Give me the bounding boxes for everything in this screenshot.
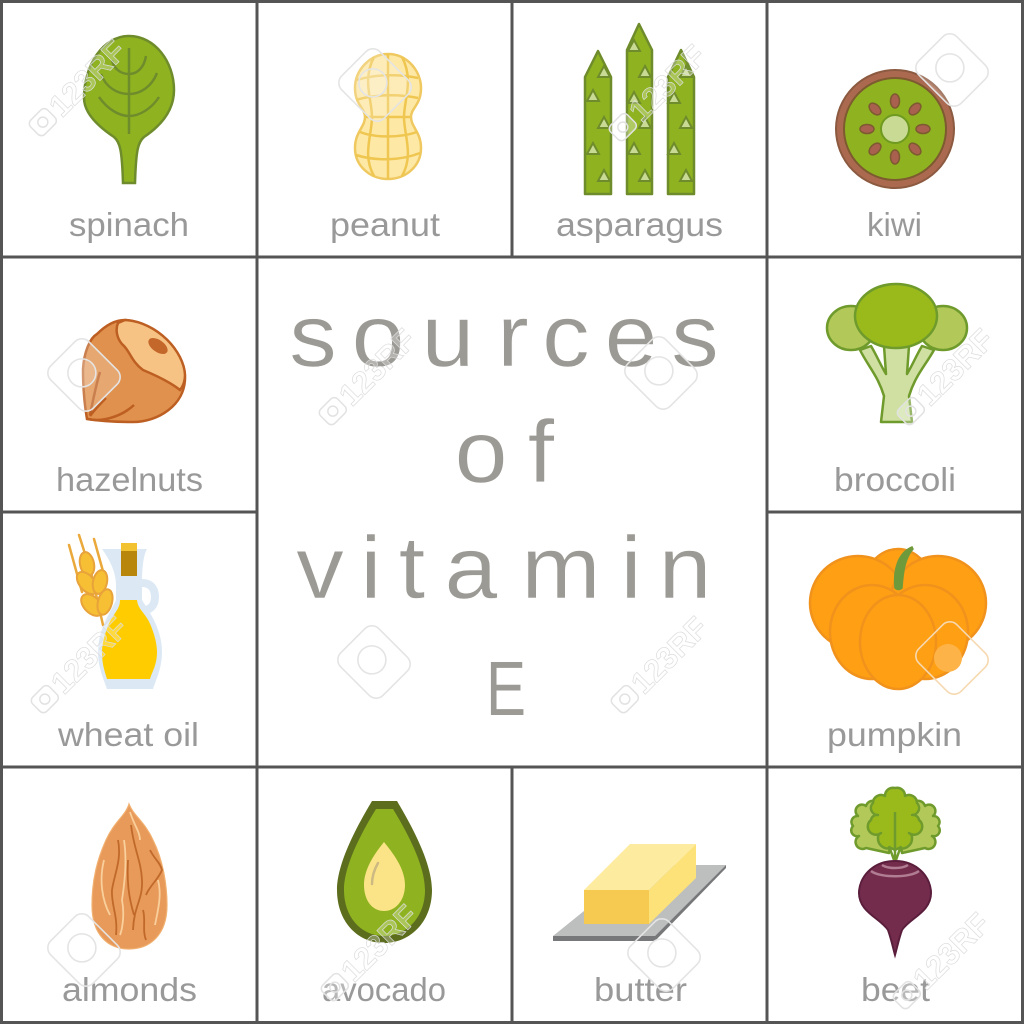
watermarks: 123RF [622,38,713,129]
panel: almonds [62,804,197,1008]
label: pumpkin: pumpkin [827,716,962,753]
label: almonds: almonds [62,971,197,1008]
icon: pumpkin [810,547,986,689]
label: wheat oil: wheat oil [57,716,199,753]
title: sources: sources [289,287,719,385]
label: beet: beet [861,971,930,1008]
watermarks: 123RF [906,906,997,997]
icon: glass jug [98,543,162,689]
panel: pumpkin [810,547,986,753]
panel: beet [851,788,940,1008]
label: avocado: avocado [322,971,446,1008]
icon: peanut [355,54,421,179]
label: kiwi: kiwi [867,206,922,243]
icon: wheat ear [69,535,115,625]
icon: avocado half [337,801,432,943]
panel: hazelnuts [56,320,203,498]
panel: title [289,287,719,732]
icon: spinach leaf [84,36,174,183]
watermarks: 123RF [42,33,133,124]
watermarks: 123RF [44,610,135,701]
label: asparagus: asparagus [556,206,723,243]
icon: kiwi slice [836,70,954,188]
icon: broccoli [827,284,967,422]
title: of: of [455,403,555,501]
panel: spinach [69,36,189,243]
label: butter: butter [594,971,687,1008]
watermarks: 123RF [334,898,425,989]
icon: butter on a dish [553,844,726,941]
icon: beet leaves [851,788,940,860]
panel: kiwi [836,70,954,243]
panel: avocado [322,801,446,1008]
label: broccoli: broccoli [834,461,956,498]
icon: beet [851,788,940,955]
icon: asparagus spears [585,24,694,194]
icon: hazelnut [83,320,185,422]
panel: broccoli [827,284,967,498]
title: E: E [486,646,526,732]
title: vitamin: vitamin [296,519,711,617]
panel: butter [553,844,726,1008]
label: spinach: spinach [69,206,189,243]
panel: peanut [330,54,440,243]
watermarks: 123RF [624,610,715,701]
icon: almond [92,804,167,949]
label: hazelnuts: hazelnuts [56,461,203,498]
watermarks: 123RF [910,322,1001,413]
watermarks: 123RF [332,322,423,413]
panel: wheat oil [57,535,199,753]
icon: oil bottle with wheat [69,535,162,689]
panel: asparagus [556,24,723,243]
label: peanut: peanut [330,206,440,243]
